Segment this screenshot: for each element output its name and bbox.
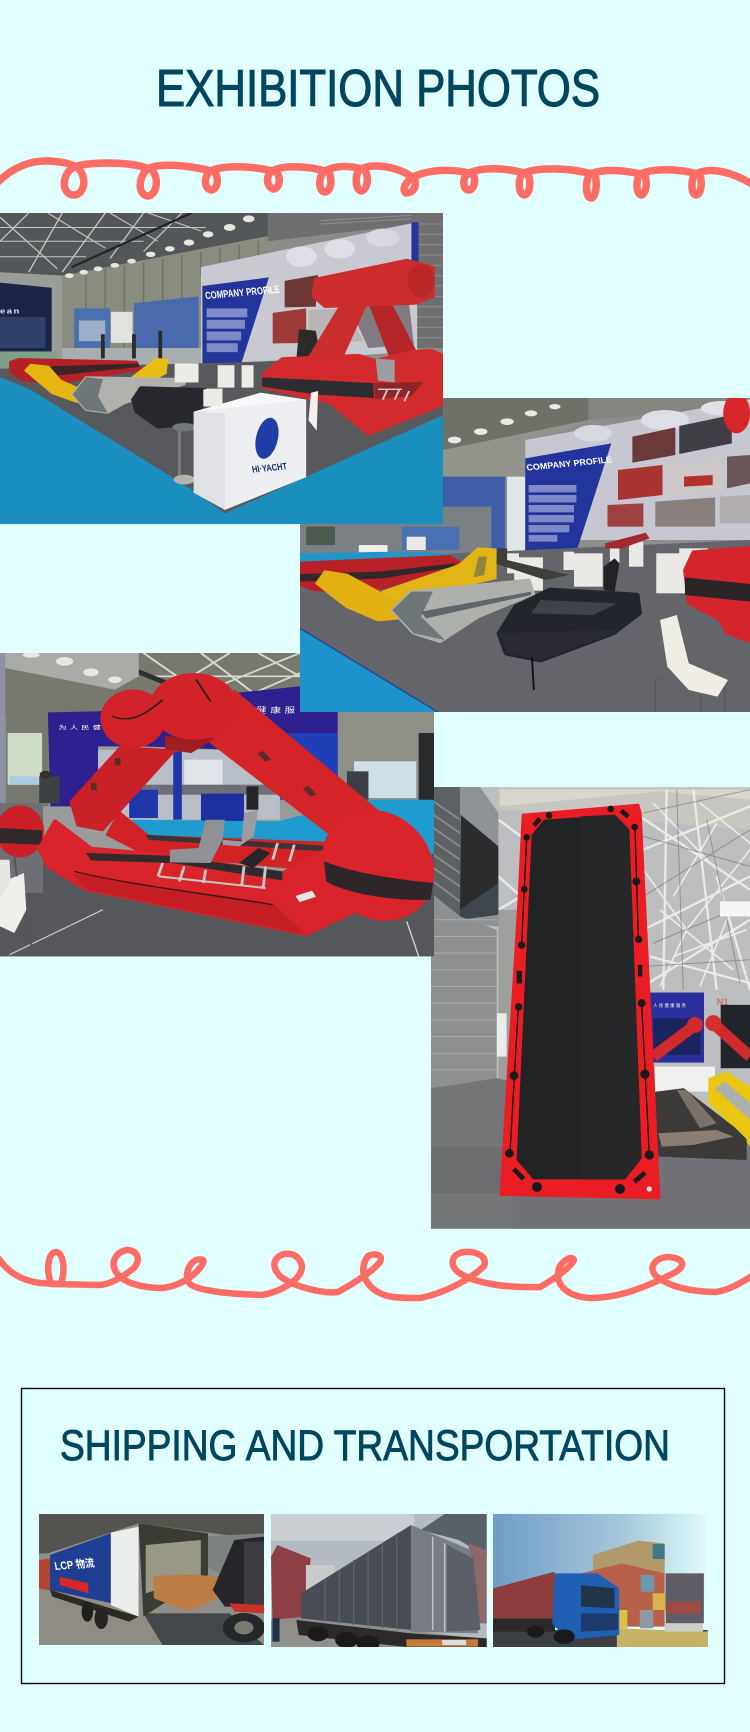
rear arm — [69, 747, 177, 832]
photo: boats row close-up with company profile wall: COMPANY PROFILE — [526, 455, 613, 473]
photo: exhibition booth overview: ean — [0, 307, 21, 315]
grey boat — [73, 377, 184, 413]
photo: red inflatable triangle raft: 健康服 — [256, 705, 299, 714]
seats and rails — [170, 820, 225, 863]
truck cab — [39, 1558, 57, 1592]
front arm — [203, 690, 378, 845]
photo: exhibition booth overview: HI·YACHT — [251, 460, 289, 475]
rear raft tube — [108, 813, 328, 868]
top ball left — [100, 690, 166, 748]
photo: forklift loading container: LCP 物流 — [54, 1556, 96, 1573]
yellow boat — [317, 572, 397, 620]
trailer — [493, 1572, 555, 1618]
black boat — [500, 590, 639, 660]
title: exhibition photos: EXHIBITION PHOTOS — [156, 60, 600, 118]
photo: red inflatable triangle raft: 为人民健 — [58, 724, 104, 732]
blue floor — [300, 628, 438, 712]
window — [8, 733, 42, 785]
red board — [501, 805, 659, 1199]
top ball front — [150, 673, 238, 740]
yellow boat — [26, 365, 79, 401]
blue cab — [553, 1573, 620, 1640]
container — [301, 1525, 411, 1630]
floor — [39, 1583, 264, 1645]
booth backdrop — [201, 223, 417, 365]
podium logo — [252, 416, 282, 460]
container stacks — [593, 1541, 665, 1573]
photo: exhibition booth overview — [0, 213, 443, 524]
left dark booth — [0, 272, 62, 358]
chassis — [297, 1620, 487, 1647]
tables and chairs — [175, 363, 254, 406]
divider: top red squiggle — [0, 161, 750, 198]
heading: shipping and transportation: SHIPPING AND TRANSPORTATION — [60, 1422, 670, 1470]
photo: blue truck at container yard — [493, 1514, 708, 1647]
white podium — [194, 393, 306, 510]
panel: shipping and transportation frame — [22, 1388, 724, 1684]
floor — [0, 372, 443, 524]
left bow ball — [0, 806, 44, 858]
company profile panel — [525, 443, 611, 552]
carpet — [0, 853, 434, 957]
divider: bottom red squiggle — [0, 1250, 750, 1298]
wall pictures — [285, 275, 318, 307]
photo: forklift loading container — [39, 1514, 264, 1645]
big red boat — [306, 293, 371, 360]
wall pictures — [632, 427, 675, 463]
bow ball — [310, 804, 446, 927]
white chairs — [0, 873, 26, 933]
forklift — [213, 1537, 264, 1607]
mid booth — [74, 308, 110, 348]
front raft tube — [39, 821, 352, 935]
blue booth in background — [650, 993, 704, 1063]
photo: grey container truck — [271, 1514, 487, 1647]
wheels — [82, 1602, 93, 1622]
carpet — [300, 540, 750, 712]
black boat — [133, 387, 206, 427]
grey boat — [392, 580, 533, 642]
ground — [493, 1630, 708, 1647]
photo: inflatable deck board standing upright — [431, 787, 750, 1229]
booth backdrop — [525, 399, 750, 540]
big red tube right — [685, 547, 750, 642]
purple booth banner — [48, 687, 338, 807]
ground — [271, 1617, 487, 1647]
white chair — [660, 615, 728, 697]
photo: boats row close-up with company profile wall — [300, 398, 750, 712]
photo: inflatable deck board standing upright: N1 — [717, 997, 729, 1007]
container side — [50, 1533, 112, 1603]
hall side wall — [62, 236, 268, 358]
crate — [153, 1574, 218, 1612]
background hall lower left — [300, 507, 491, 560]
red boat small — [11, 359, 140, 382]
photo: red inflatable triangle raft — [0, 653, 434, 956]
tables and chairs — [507, 542, 708, 593]
upper wall — [268, 213, 443, 348]
person — [297, 329, 320, 356]
company profile panel — [202, 277, 269, 363]
photo: exhibition booth overview: COMPANY PROFILE — [204, 283, 281, 301]
ceiling truss — [0, 213, 268, 275]
open doors — [111, 1527, 139, 1617]
blue side booth — [443, 477, 505, 553]
container stack left — [271, 1545, 311, 1623]
red boat — [300, 556, 460, 591]
photo: inflatable deck board standing upright: 人民健康服务 — [653, 1002, 687, 1009]
